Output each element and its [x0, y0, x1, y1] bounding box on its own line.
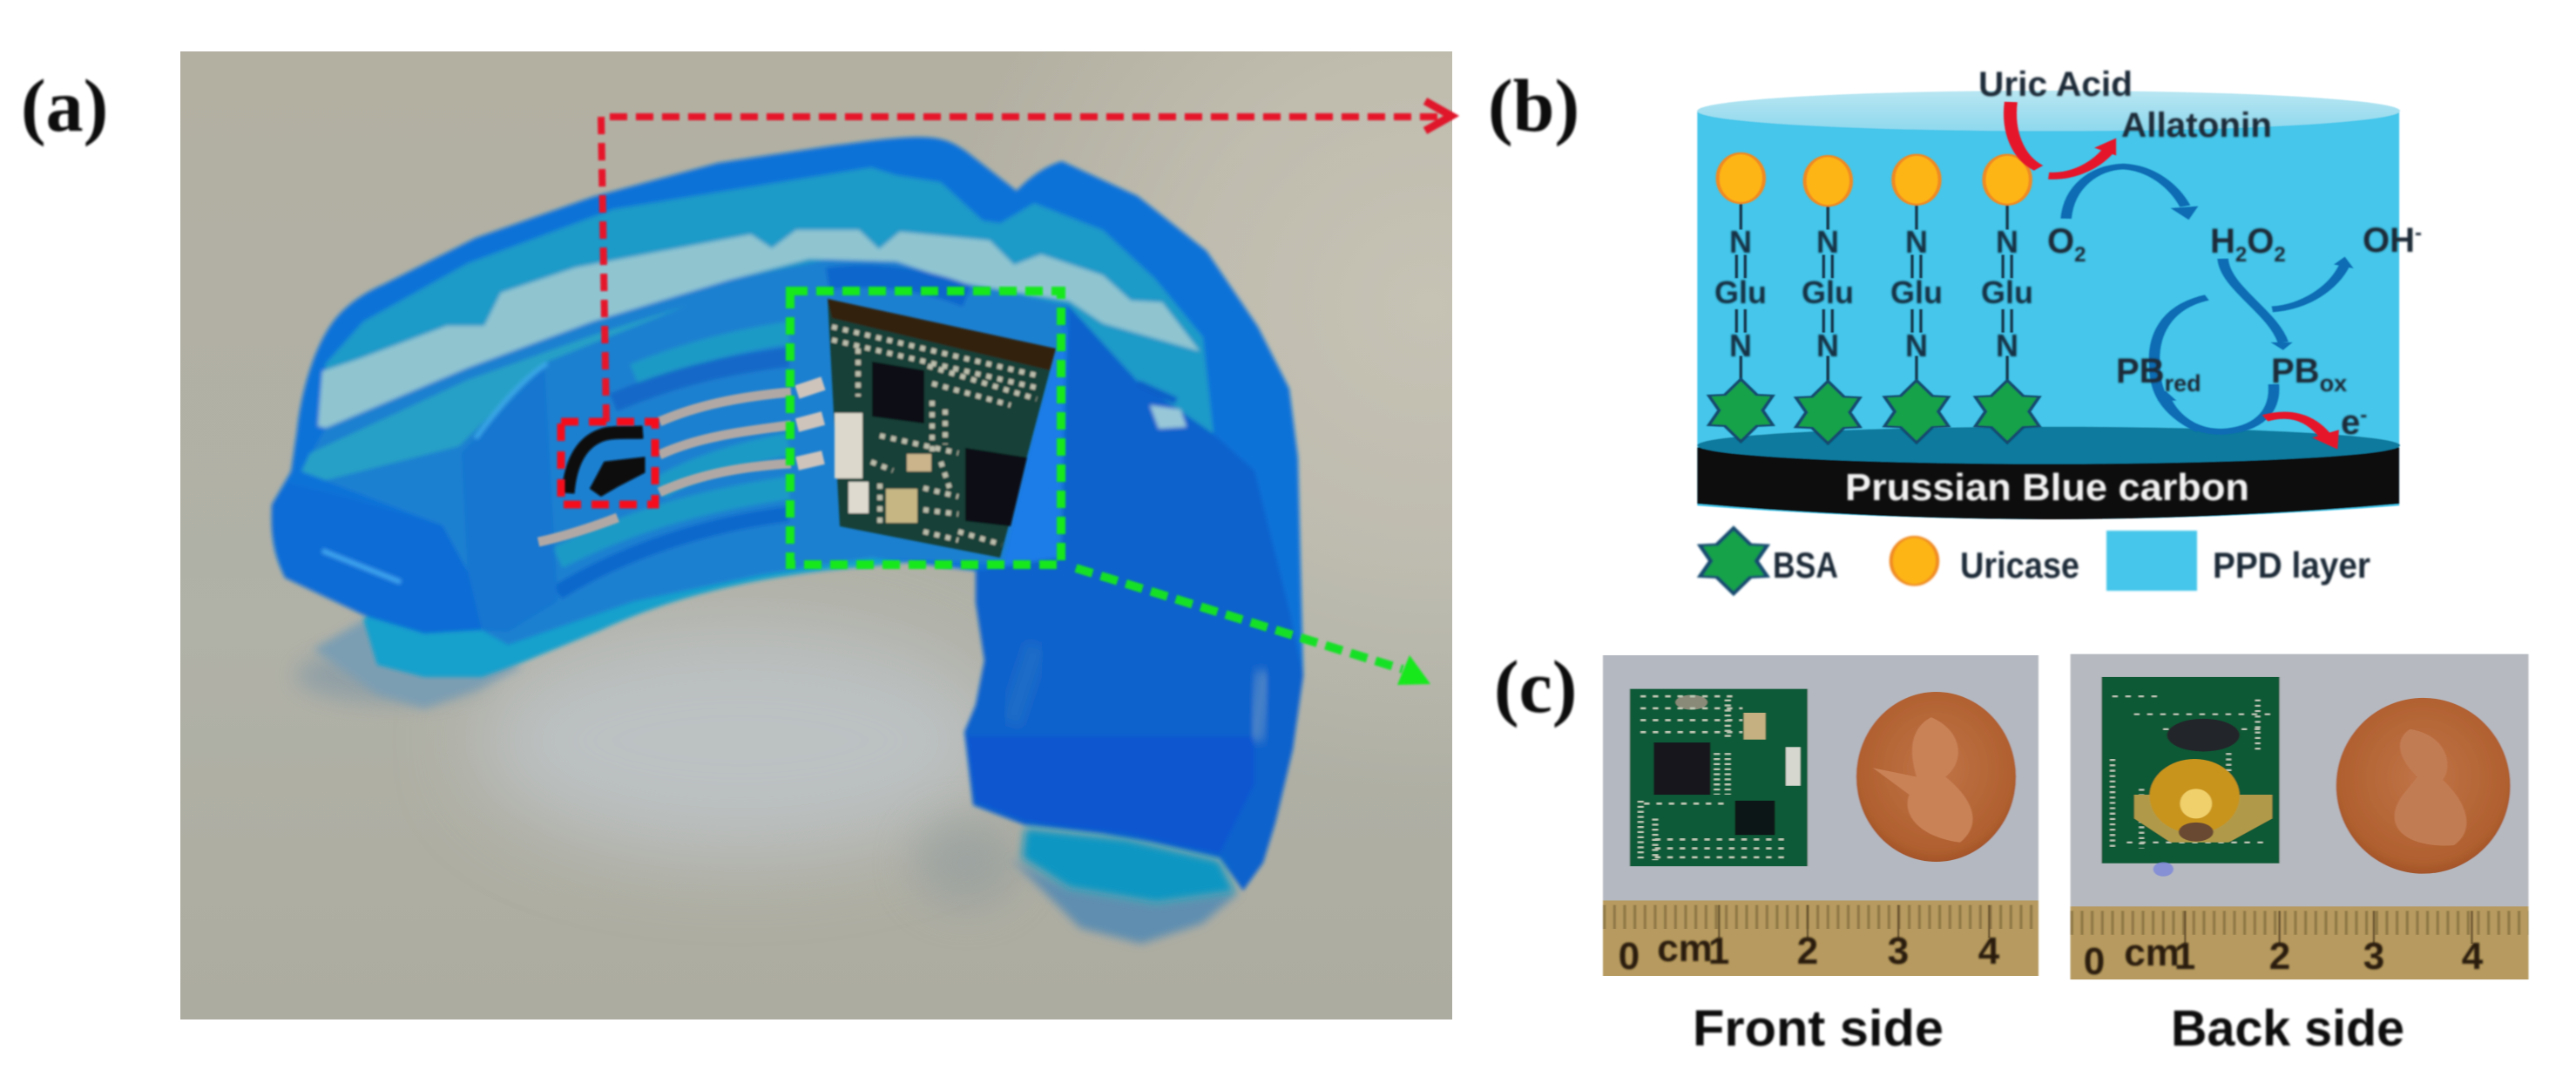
panel a: mouthguard photograph: [180, 51, 1452, 1019]
reaction labels: e: [2341, 403, 2360, 442]
right arm: [964, 306, 1303, 891]
penny: [2336, 698, 2511, 874]
right block cyan foot: [1022, 828, 1235, 904]
reaction labels: 2: [2235, 243, 2247, 267]
panel c: board photographs: [1603, 654, 2528, 1057]
red dashed callout arrow: [561, 101, 1451, 505]
photo background: [180, 51, 1452, 1019]
white connectors: [835, 413, 862, 478]
chain labels: N: [1996, 328, 2018, 363]
reaction labels: PB: [2116, 352, 2165, 390]
solder dots: [832, 327, 1041, 545]
reaction labels: O: [2247, 222, 2274, 261]
back ruler numbers: 3: [2363, 935, 2384, 978]
lower cyan lip: [363, 523, 950, 677]
label (a): (a): [21, 64, 108, 147]
label (c): (c): [1494, 645, 1577, 728]
teal window: [318, 167, 1214, 434]
front ruler numbers: [1619, 927, 2000, 978]
legend: PPD layer: [2213, 545, 2370, 586]
legend: Uricase: [1960, 545, 2079, 586]
ruler: [2071, 906, 2528, 979]
back side photo: [2071, 654, 2528, 979]
red reaction arrows: [2011, 102, 2339, 450]
chain labels: Glu: [1802, 274, 1854, 310]
back ruler numbers: cm: [2124, 931, 2180, 974]
outer silhouette: [272, 137, 1303, 891]
blue reaction arrows: [2066, 166, 2354, 432]
legend: BSA: [1773, 545, 1838, 586]
back ruler numbers: 2: [2269, 935, 2290, 978]
notch light spot: [1150, 405, 1187, 429]
reaction labels: H: [2210, 222, 2235, 261]
front block: [272, 484, 482, 633]
inner body: [301, 260, 1063, 645]
reaction labels: 2: [2274, 243, 2286, 267]
front board: [1630, 689, 1808, 866]
cylinder: [1697, 91, 2400, 519]
enzyme chains: [1709, 153, 2039, 444]
chain labels: Glu: [1714, 274, 1767, 310]
ruler: [1603, 900, 2038, 976]
penny: [1856, 692, 2016, 862]
chain labels: N: [1996, 224, 2018, 260]
front ruler numbers: 2: [1797, 930, 1818, 972]
icon: uricase circle: [1891, 537, 1937, 585]
chain labels: [1714, 224, 2033, 363]
chain labels: N: [1905, 224, 1928, 260]
front ruler numbers: 0: [1619, 935, 1640, 978]
front ruler numbers: cm: [1657, 927, 1713, 970]
panel b: sensor layer schematic: [1697, 65, 2422, 593]
front ruler numbers: 1: [1708, 930, 1729, 972]
icon: BSA star: [1700, 528, 1767, 593]
electrode: [568, 432, 643, 493]
pale window band: [318, 230, 1200, 428]
left teal wedge: [301, 305, 688, 480]
green dashed callout arrow: [790, 291, 1430, 685]
lip shadow: [314, 619, 523, 708]
chain labels: Glu: [1890, 274, 1943, 310]
reaction labels: -: [2415, 221, 2422, 245]
back ruler numbers: 4: [2462, 935, 2484, 978]
Prussian Blue carbon label: Prussian Blue carbon: [1845, 466, 2249, 509]
chips: [872, 362, 1027, 526]
reaction labels: -: [2360, 403, 2367, 427]
reaction labels: red: [2165, 370, 2201, 396]
back board: [2101, 677, 2280, 864]
reaction labels: Allatonin: [2121, 106, 2272, 145]
reaction labels: Uric Acid: [1978, 65, 2133, 104]
silver traces: [538, 392, 791, 542]
back ruler numbers: 0: [2084, 940, 2105, 983]
foot shadow: [1011, 858, 1240, 944]
chain labels: N: [1905, 328, 1928, 363]
label (b): (b): [1488, 64, 1579, 147]
chain labels: N: [1729, 224, 1752, 260]
caption: back side: Back side: [2171, 1000, 2404, 1057]
circuit board: [828, 299, 1056, 558]
chain labels: N: [1816, 328, 1839, 363]
battery clip: [2134, 795, 2272, 843]
front ruler numbers: 3: [1888, 930, 1909, 972]
chain labels: Glu: [1981, 274, 2033, 310]
sensor and traces: [538, 383, 823, 542]
reaction labels: 2: [2074, 243, 2086, 267]
inner teal stripes: [558, 333, 788, 558]
legend: [1700, 528, 2370, 593]
chain labels: N: [1816, 224, 1839, 260]
front ruler numbers: 4: [1978, 930, 2000, 972]
front side photo: [1603, 655, 2038, 976]
reaction labels: OH: [2363, 221, 2415, 260]
icon: PPD layer swatch: [2106, 531, 2197, 591]
caption: front side: Front side: [1693, 1000, 1944, 1057]
back ruler numbers: 1: [2174, 935, 2195, 978]
back ruler numbers: [2084, 931, 2484, 983]
reaction labels: O: [2047, 222, 2074, 261]
reaction labels: [1978, 65, 2422, 442]
chain labels: N: [1729, 328, 1752, 363]
reaction labels: PB: [2271, 352, 2320, 390]
mouthguard device: [272, 137, 1303, 891]
reaction labels: ox: [2320, 370, 2347, 396]
